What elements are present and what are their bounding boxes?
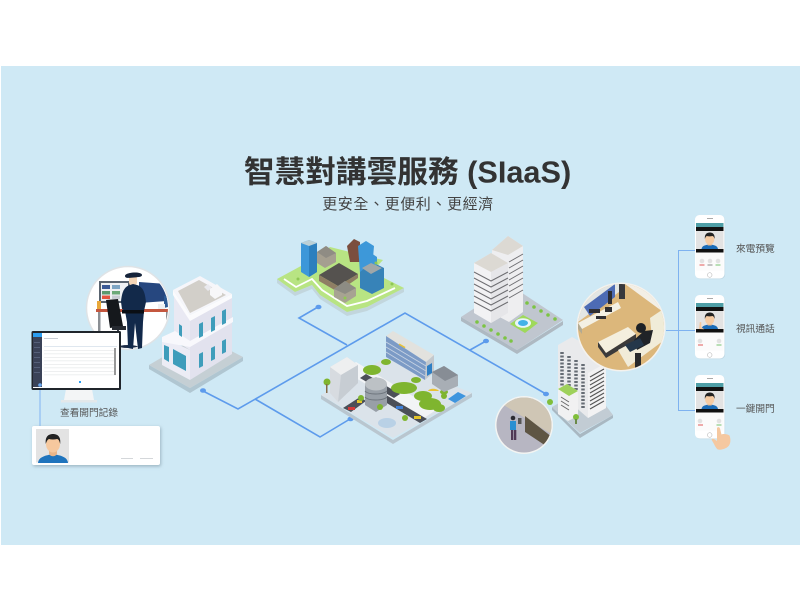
icon: pointing hand	[712, 427, 730, 450]
illustration: central commercial district	[321, 331, 472, 444]
illustration: visitor at door panel in circle	[495, 396, 553, 454]
phone branch connector lines	[666, 250, 696, 410]
label: view door log: 查看開門記錄	[60, 406, 118, 419]
label: one-touch door open: 一鍵開門	[736, 402, 775, 415]
illustration: green city block	[277, 239, 404, 316]
connector: monitor to visitor card	[39, 386, 41, 426]
subtitle: 更安全、更便利、更經濟	[322, 196, 494, 213]
phone: one-touch door open with hand	[695, 375, 730, 450]
label: video call: 視訊通話	[736, 322, 775, 335]
background panel	[1, 66, 800, 545]
phone: incoming call preview	[695, 215, 725, 279]
phone: video call	[695, 295, 725, 359]
illustration: police officer in circle	[86, 266, 174, 350]
illustration: residential tower	[547, 337, 613, 438]
illustration: twin towers with plaza	[461, 236, 563, 354]
network connector lines	[200, 305, 549, 437]
title: 智慧對講雲服務 (SIaaS)	[244, 154, 571, 190]
icon: office building	[149, 276, 243, 393]
monitor: door access log dashboard	[32, 331, 121, 402]
visitor record card	[32, 426, 161, 466]
label: incoming call preview: 來電預覽	[736, 242, 775, 255]
illustration: living room in circle	[576, 282, 666, 372]
